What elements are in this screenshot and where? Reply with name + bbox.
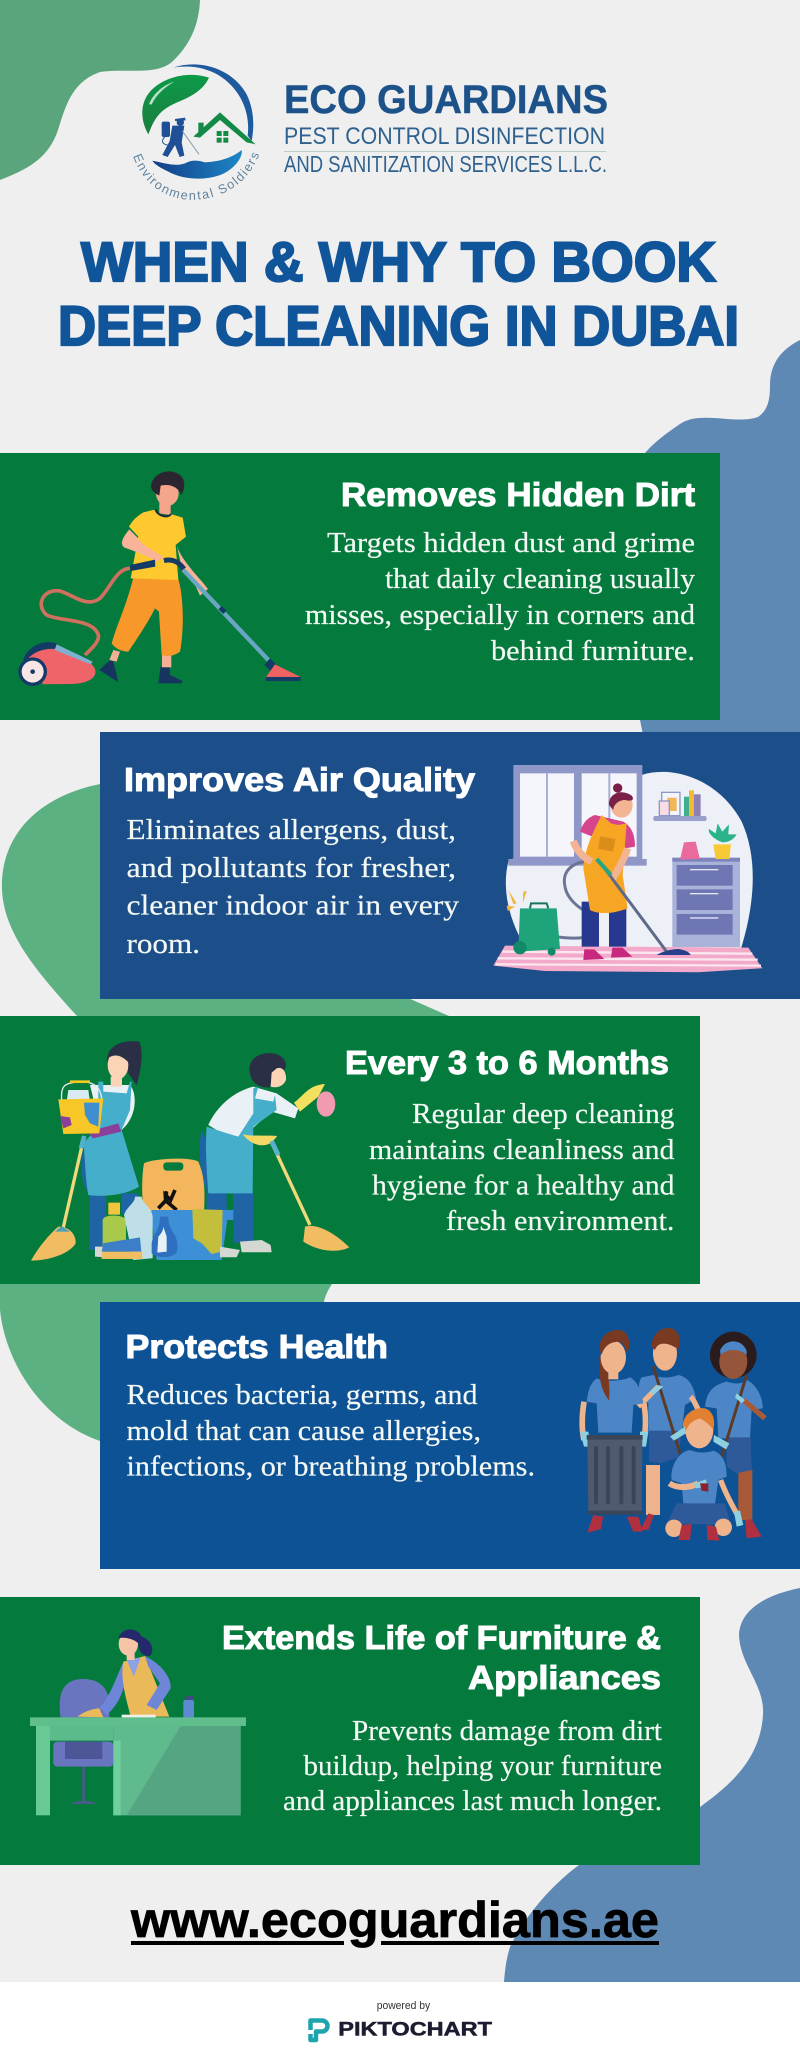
- footer: [0, 1982, 800, 2062]
- blob: top-left green: [0, 0, 200, 180]
- logo tagline line 1: PEST CONTROL DISINFECTION: [284, 123, 605, 150]
- body text: behind furniture.: [491, 635, 695, 667]
- logo name: ECO GUARDIANS: [284, 78, 608, 122]
- heading: Extends Life of Furniture &: [222, 1619, 661, 1656]
- website link: www.ecoguardians.ae: [130, 1892, 659, 1948]
- logo: Eco Guardians: [133, 64, 608, 200]
- piktochart wordmark: PIKTOCHART: [338, 2020, 492, 2041]
- panel: Removes Hidden Dirt: [0, 453, 720, 720]
- heading: Every 3 to 6 Months: [345, 1044, 669, 1081]
- heading: Removes Hidden Dirt: [341, 476, 695, 513]
- body text: Targets hidden dust and grime: [327, 527, 695, 559]
- logo emblem: [133, 64, 259, 200]
- panel: Every 3 to 6 Months: [0, 1016, 700, 1284]
- body text: fresh environment.: [446, 1205, 674, 1237]
- body text: and pollutants for fresher,: [126, 852, 456, 884]
- blob: right blue top: [640, 340, 800, 740]
- body text: [126, 814, 460, 960]
- body text: that daily cleaning usually: [385, 563, 695, 595]
- heading: Protects Health: [126, 1328, 388, 1365]
- body text: buildup, helping your furniture: [304, 1750, 662, 1782]
- panel: Extends Life of Furniture & Appliances: [0, 1597, 700, 1865]
- body text: cleaner indoor air in every: [126, 890, 460, 922]
- icon: cleaning team of four: [580, 1328, 765, 1541]
- body text: Regular deep cleaning: [412, 1098, 674, 1130]
- logo emblem: Environmental Soldiers: [133, 152, 259, 200]
- icon: woman vacuuming room: [493, 765, 762, 972]
- body text: misses, especially in corners and: [305, 599, 696, 631]
- body text: and appliances last much longer.: [283, 1785, 662, 1817]
- body text: [305, 527, 696, 667]
- icon: man vacuuming: [18, 471, 301, 686]
- body text: maintains cleanliness and: [369, 1134, 675, 1166]
- body text: [369, 1098, 675, 1237]
- title: [58, 230, 739, 357]
- blob: middle green lower: [0, 1284, 332, 1441]
- icon: two cleaners with supplies: [31, 1041, 349, 1261]
- icon: piktochart logo: [310, 2020, 328, 2040]
- panel: Protects Health: [100, 1302, 800, 1569]
- body text: Prevents damage from dirt: [352, 1715, 662, 1747]
- heading: Improves Air Quality: [124, 761, 476, 798]
- logo tagline line 2: AND SANITIZATION SERVICES L.L.C.: [284, 151, 607, 177]
- title: DEEP CLEANING IN DUBAI: [58, 294, 739, 357]
- body text: [283, 1715, 662, 1817]
- body text: room.: [126, 928, 200, 960]
- panel: Improves Air Quality: [100, 732, 800, 999]
- body text: hygiene for a healthy and: [372, 1170, 675, 1202]
- heading: Appliances: [468, 1659, 661, 1696]
- body text: infections, or breathing problems.: [126, 1450, 535, 1482]
- title: WHEN & WHY TO BOOK: [81, 230, 716, 293]
- body text: Reduces bacteria, germs, and: [126, 1379, 478, 1411]
- body text: Eliminates allergens, dust,: [126, 814, 456, 846]
- powered by: powered by: [377, 2000, 431, 2012]
- blob: bottom-right blue: [504, 1588, 800, 1982]
- body text: [126, 1379, 535, 1482]
- body text: mold that can cause allergies,: [126, 1415, 481, 1447]
- icon: woman cleaning desk: [30, 1629, 246, 1815]
- heading: [222, 1619, 661, 1696]
- blob: middle green upper: [2, 784, 449, 1016]
